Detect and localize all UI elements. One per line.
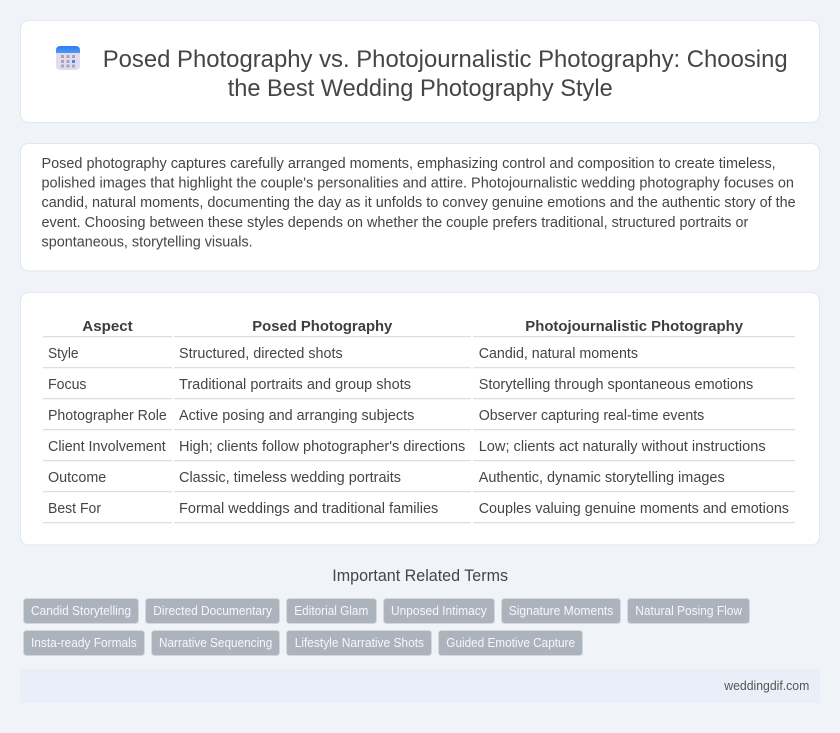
table row: photographer role: Photographer Role — [48, 408, 167, 424]
table row: photographer role: Active posing and arranging subjects — [179, 408, 414, 424]
table row: best for — [48, 501, 789, 517]
table row: focus: Traditional portraits and group shots — [179, 377, 411, 393]
table row: client involvement: Low; clients act naturally without instructions — [479, 439, 766, 455]
tag: insta-ready formals: Insta-ready Formals — [31, 635, 137, 650]
footer: weddingdif.com — [723, 678, 809, 693]
table row: style — [48, 346, 638, 362]
table row: style: Style — [48, 346, 78, 362]
table row: focus: Storytelling through spontaneous emotions — [479, 377, 753, 393]
panel: title header — [20, 20, 820, 122]
panel: related term tags — [24, 598, 750, 656]
table header row — [82, 319, 744, 335]
tag: unposed intimacy — [384, 598, 494, 624]
text block: introduction paragraph: event. Choosing between these styles depends on whether the couple prefers traditional, structured portraits or — [42, 215, 748, 231]
tag: lifestyle narrative shots: Lifestyle Narrative Shots — [295, 635, 424, 650]
title: the Best Wedding Photography Style — [228, 75, 613, 102]
table row: photographer role — [48, 408, 704, 424]
tag: unposed intimacy: Unposed Intimacy — [391, 603, 487, 618]
table row: best for: Couples valuing genuine moments and emotions — [479, 501, 789, 517]
text block: introduction paragraph: spontaneous, storytelling visuals. — [42, 234, 253, 250]
table row: outcome — [48, 470, 725, 486]
tag: signature moments: Signature Moments — [509, 603, 613, 618]
table row: best for: Best For — [48, 501, 101, 517]
table header row: Posed Photography — [252, 319, 393, 335]
table row: focus: Focus — [48, 377, 86, 393]
table header row: Aspect — [82, 319, 133, 335]
table row: outcome: Classic, timeless wedding portraits — [179, 470, 401, 486]
table row: style: Candid, natural moments — [479, 346, 638, 362]
table row: client involvement — [48, 439, 766, 455]
table row: best for: Formal weddings and traditional families — [179, 501, 438, 517]
tag: guided emotive capture: Guided Emotive Capture — [446, 635, 575, 650]
tag: directed documentary — [146, 598, 280, 624]
heading: important related terms: Important Related Terms — [332, 567, 508, 585]
panel: comparison table — [20, 292, 820, 545]
tag: directed documentary: Directed Documentary — [153, 603, 273, 618]
table header row: Photojournalistic Photography — [525, 319, 744, 335]
table row: outcome: Outcome — [48, 470, 106, 486]
table row: outcome: Authentic, dynamic storytelling images — [479, 470, 725, 486]
panel: introduction — [20, 144, 820, 271]
table row: style: Structured, directed shots — [179, 346, 343, 362]
table row: photographer role: Observer capturing real-time events — [479, 408, 704, 424]
tag: editorial glam: Editorial Glam — [294, 603, 368, 618]
title: Posed Photography vs. Photojournalistic Photography: Choosing — [103, 46, 788, 73]
tag: signature moments — [502, 598, 620, 624]
table row: focus — [48, 377, 753, 393]
text block: introduction paragraph: polished images that highlight the couple's personalities and attire. Photojournalistic wedding photography focuses on — [42, 176, 794, 192]
table row: client involvement: High; clients follow photographer's directions — [179, 439, 465, 455]
tag: candid storytelling: Candid Storytelling — [31, 603, 131, 618]
tag: narrative sequencing — [152, 630, 280, 656]
footer — [20, 669, 820, 703]
tag: natural posing flow — [628, 598, 750, 624]
tag: narrative sequencing: Narrative Sequencing — [159, 635, 272, 650]
tag: editorial glam — [286, 598, 376, 624]
tag: guided emotive capture — [438, 630, 582, 656]
table row: client involvement: Client Involvement — [48, 439, 166, 455]
title — [103, 46, 788, 102]
text block: introduction paragraph: candid, natural moments, documenting the day as it unfolds to convey genuine emotions and the authentic story of the — [42, 195, 796, 211]
tag: candid storytelling — [24, 598, 138, 624]
tag: insta-ready formals — [24, 630, 144, 656]
text block: introduction paragraph — [42, 156, 796, 250]
tag: lifestyle narrative shots — [286, 630, 432, 656]
icon: calendar — [56, 46, 80, 70]
text block: introduction paragraph: Posed photography captures carefully arranged moments, emphasizing control and composition to create timeless, — [42, 156, 776, 172]
tag: natural posing flow: Natural Posing Flow — [635, 603, 743, 618]
